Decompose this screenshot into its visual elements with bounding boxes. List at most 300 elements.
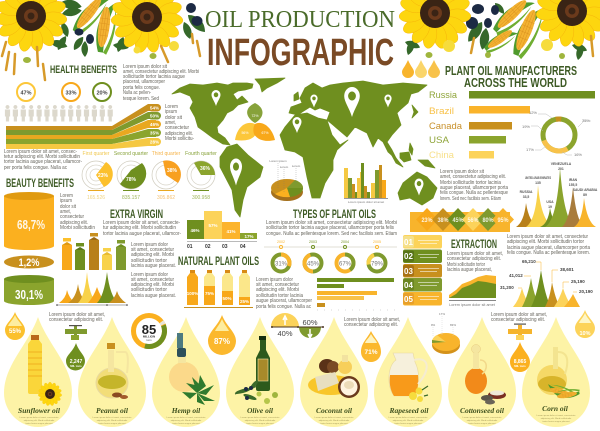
faucet: [65, 325, 87, 340]
sunflower: [38, 382, 62, 406]
text blocks: lacinia augue placerat.: [131, 293, 176, 299]
numbered list: 01: [404, 238, 413, 247]
oil producers peak chart: 201: [558, 167, 564, 171]
sunflower oil drop: tortor lacinia augue placerat: [26, 422, 53, 425]
text block: Lorem: [60, 193, 73, 199]
hemp oil drop: Lorem ipsum dolor sit amet, consectetur: [167, 416, 206, 419]
country bars: China: [429, 150, 455, 161]
dropper bottle: [169, 362, 199, 392]
stacked ribbon chart: 46%: [150, 122, 159, 127]
text and faucet with drop: left: MIL tons: [70, 364, 82, 368]
up and down split chart: 40%: [277, 329, 293, 338]
text block left: Morbi sollicitudin tortor: [447, 262, 485, 268]
foliage: [49, 0, 588, 61]
cottonseed oil drop: Cottonseed oil: [460, 406, 505, 415]
ribbon text: consectetur: [165, 125, 189, 131]
peak chart: 38,601: [560, 267, 574, 272]
bar chart: quarterly: 41%: [226, 229, 236, 234]
panel: types of plant oils: [264, 207, 397, 273]
third quarter: 305.862: [157, 195, 175, 201]
text block: adipiscing elit. Morbi: [256, 287, 299, 293]
timeline: 2004: [341, 240, 349, 244]
seeds and bowl: [488, 391, 506, 399]
olive oil drop: Olive oil: [247, 406, 274, 415]
percentage rings: 47%: [20, 90, 32, 96]
text and faucet with drop: left: [49, 312, 105, 370]
fourth quarter: [185, 151, 217, 201]
text block right: adipiscing elit. Morbi sollicitudin tortor: [507, 239, 584, 245]
timeline: 2003: [309, 240, 317, 244]
text block under ribbons: tortor lacinia augue placerat, ullamcor-: [4, 159, 82, 165]
second quarter: [114, 151, 148, 201]
ribbon text: Lorem: [165, 104, 178, 110]
title: INFOGRAPHIC: [207, 32, 394, 74]
rapeseed flowers: [409, 388, 423, 402]
donut: 35%: [582, 118, 590, 123]
stacked ribbon chart: 54%: [150, 106, 159, 110]
people row: [5, 105, 113, 122]
text block over australia: lorem. Sed nec facilisis sem. Etiam: [440, 196, 501, 202]
olives: [74, 3, 499, 44]
text block: tur adipiscing elit. Morbi sollicitudin: [103, 225, 176, 231]
area chart: Lorem ipsum dolor sit amet: [449, 303, 496, 307]
hemp oil drop: adipiscing elit. Morbi sollicitudin: [171, 419, 202, 422]
bar chart: quarterly: 04: [240, 244, 246, 250]
text block: congue. Nulla ac pellentesque lorem. Sed nec facilisis sem. Etiam: [266, 231, 397, 237]
text block: [103, 220, 181, 237]
text block: amet, consectetur adipiscing elit. Morbi: [123, 69, 199, 75]
peanut oil drop: adipiscing elit. Morbi sollicitudin: [97, 419, 128, 422]
donut charts: 67%: [339, 262, 352, 268]
panel: extra virgin: [56, 207, 181, 306]
percentage diamonds ribbon: 95%: [498, 217, 509, 224]
ribbon text: dolor sit: [165, 115, 182, 121]
horizontal bar chart: [317, 278, 397, 310]
bars over the indian ocean: [344, 163, 388, 204]
3d pie chart: bottom: [431, 312, 460, 354]
coconut oil drop: adipiscing elit. Morbi sollicitudin: [319, 419, 350, 422]
panel: plant oil manufacturers: [402, 60, 595, 161]
second quarter: Second quarter: [114, 151, 148, 157]
oil producers peak chart: 33,5: [523, 195, 529, 199]
text and faucet with drop: right: 8,865: [514, 359, 526, 365]
text block: Lorem ipsum dolor sit: [123, 64, 167, 70]
text block: [266, 220, 397, 237]
text block: placerat, ullamcorper: [123, 79, 165, 85]
text block: ipsum: [60, 198, 72, 204]
sunflower oil drop: Lorem ipsum dolor sit amet, consectetur: [20, 416, 59, 419]
first quarter: 23%: [98, 173, 109, 179]
numbered list: 02: [404, 252, 413, 261]
small drop: 71%: [361, 331, 381, 362]
text block over australia: augue placerat, ullamcorper porta: [440, 185, 509, 191]
panel: natural plant oils: [178, 254, 312, 310]
text and faucet with drop: right: Lorem ipsum dolor sit amet,: [491, 312, 547, 318]
text block: augue placerat, ullamcorper: [256, 298, 312, 304]
small drop: 55%: [5, 312, 25, 340]
numbered list: 05: [404, 295, 413, 304]
text blocks: [131, 242, 176, 299]
peak chart: 25,190: [571, 279, 585, 284]
country bars: [429, 90, 595, 161]
olive oil drop: tortor lacinia augue placerat: [246, 422, 274, 425]
percentage diamonds ribbon: 23%: [422, 217, 433, 224]
jug: [389, 353, 419, 396]
text and faucet with drop: left: Lorem ipsum dolor sit amet,: [49, 312, 105, 318]
corn cobs: [69, 0, 547, 61]
hemp oil drop: [152, 317, 220, 427]
numbered list: 03: [404, 267, 413, 276]
north america: [172, 83, 253, 145]
text and faucet with drop: left: consectetur adipiscing elit.: [49, 317, 103, 323]
text and faucet with drop: right: [491, 312, 547, 372]
3d pie chart: bottom: 17%: [439, 312, 445, 316]
sunflower oil drop: [4, 317, 72, 427]
text block: consectetur: [60, 214, 84, 220]
donut: 19%: [522, 124, 530, 129]
bar chart: quarterly: [187, 211, 257, 250]
bottles: 100%: [187, 291, 198, 296]
flask: [537, 365, 567, 395]
coconut oil drop: Lorem ipsum dolor sit amet, consectetur: [315, 416, 354, 419]
donut charts: 79%: [371, 262, 384, 268]
text block: amet,: [60, 209, 71, 215]
text block left: lacinia augue placerat,: [447, 267, 492, 273]
rapeseed oil drop: Lorem ipsum dolor sit amet, consectetur: [389, 416, 428, 419]
third quarter: 38%: [167, 168, 178, 174]
ribbon text: ipsum: [165, 109, 177, 115]
text block over australia: Morbi sollicitudin tortor lacinia: [440, 180, 502, 186]
wheat and small buds: [2, 34, 593, 80]
petal chart: [235, 103, 275, 141]
text blocks: sit amet, consectetur: [131, 247, 174, 253]
corn oil drop: adipiscing elit. Morbi sollicitudin: [541, 417, 572, 420]
text block over australia: Lorem ipsum dolor sit: [440, 169, 484, 175]
orange drop: [510, 342, 530, 372]
text block under ribbons: [4, 149, 82, 171]
text blocks: lacinia augue placerat.: [131, 263, 176, 269]
text block: dolor sit: [60, 204, 76, 210]
donut: 17%: [526, 147, 534, 152]
small drop: 71%: 71%: [364, 349, 378, 356]
3d bars: [62, 233, 126, 270]
donut charts: [272, 253, 387, 273]
bar chart: quarterly: 17%: [244, 234, 254, 239]
small bottle: [338, 360, 352, 374]
fourth quarter: Fourth quarter: [185, 151, 217, 157]
peanut oil drop: Lorem ipsum dolor sit amet, consectetur: [93, 416, 132, 419]
cottonseed oil drop: Lorem ipsum dolor sit amet, consectetur: [463, 416, 502, 419]
text block under ribbons: Lorem ipsum dolor sit amet, consec-: [4, 149, 77, 155]
plate and butter: [308, 375, 354, 395]
timeline: [264, 240, 397, 248]
text block: Morbi sollicitudin: [60, 225, 95, 231]
text block over australia: amet, consectetur adipiscing elit.: [440, 174, 506, 180]
corn cobs: [546, 383, 575, 399]
peak chart: 31,200: [500, 285, 514, 290]
bar chart: quarterly: 03: [222, 244, 228, 250]
country bars: Canada: [429, 121, 463, 132]
text block over australia: [440, 169, 509, 202]
peak chart: 20,190: [579, 289, 593, 294]
petal chart: 56%: [241, 131, 249, 135]
text blocks: sollicitudin tortor: [131, 258, 167, 264]
percentage rings: [17, 83, 111, 101]
panel: bottom oil drops: [4, 317, 590, 427]
decanter: [465, 368, 487, 394]
first quarter: [82, 151, 113, 201]
percentage rings: 33%: [65, 90, 77, 96]
olive oil drop: adipiscing elit. Morbi sollicitudin: [245, 419, 276, 422]
bar chart: quarterly: 46%: [190, 228, 200, 233]
sunflower oil drop: adipiscing elit. Morbi sollicitudin: [24, 419, 55, 422]
donut: 16%: [574, 152, 582, 157]
donut: 85 million tons: 85: [142, 322, 156, 337]
faucet: [508, 324, 532, 340]
oil producers peak chart: 155,5: [569, 183, 577, 187]
peanuts: [112, 392, 122, 398]
text block: Nulla ac pellen-: [123, 90, 151, 96]
peak chart: 41,012: [509, 273, 523, 278]
text block: sollicitudin tortor lacinia augue: [123, 74, 185, 80]
olive bottle: [256, 336, 270, 391]
oil producers peak chart: 135: [535, 181, 541, 185]
numbered list: [403, 235, 442, 306]
africa: [280, 113, 348, 198]
ribbon text: Morbi sollicitu-: [165, 136, 194, 142]
percentage diamonds ribbon: 56%: [468, 217, 479, 224]
numbered list: 04: [404, 281, 413, 290]
stacked ribbon chart: [6, 104, 161, 149]
text block under ribbons: per porta felis congue. Nulla ac: [4, 165, 67, 171]
percentage diamonds ribbon: 80%: [482, 217, 494, 224]
small drops: [402, 60, 440, 78]
bar chart: quarterly: 01: [187, 244, 193, 250]
text block right: [507, 234, 591, 256]
small drop: 10%: [575, 310, 595, 338]
donut: 85 million tons: [127, 309, 171, 353]
text and faucet with drop: left: 2,247: [70, 359, 82, 365]
coconut oil drop: Coconut oil: [316, 406, 353, 415]
olive branch: [235, 386, 258, 394]
text blocks: sollicitudin tortor: [131, 287, 167, 293]
corn oil drop: tortor lacinia augue placerat: [542, 420, 570, 423]
panel: health benefits: [5, 64, 199, 149]
text block middle: [344, 317, 400, 328]
text block middle: Lorem ipsum dolor sit amet,: [344, 317, 400, 323]
sunflowers: [0, 0, 600, 54]
bars over the indian ocean: Lorem ipsum dolor sit amet: [348, 200, 384, 204]
3d pie on africa: Lorem: [280, 165, 289, 169]
peak chart: [56, 272, 128, 306]
country bars: Brazil: [429, 106, 454, 117]
second quarter: 78%: [126, 177, 137, 183]
quarterly pie charts: [82, 151, 217, 201]
small drop: 87%: [208, 315, 236, 355]
green drop: [66, 343, 85, 370]
text block: sollicitudin tortor lacinia: [256, 293, 304, 299]
ribbon text: [165, 104, 194, 142]
bottles: 75%: [205, 291, 214, 296]
text blocks: adipiscing elit. Morbi: [131, 252, 174, 258]
donut: 12%: [529, 110, 537, 115]
text block: porta felis congue. Nulla ac: [256, 304, 311, 310]
heading: EXTRA VIRGIN: [110, 207, 163, 221]
first quarter: First quarter: [83, 151, 110, 157]
text blocks: Lorem ipsum dolor: [131, 242, 168, 248]
coconut oil drop: tortor lacinia augue placerat: [320, 422, 348, 425]
oil producers peak chart: USA: [546, 200, 554, 204]
percentage diamonds ribbon: 45%: [452, 217, 464, 224]
ribbon text: amet,: [165, 120, 176, 126]
peanut oil drop: tortor lacinia augue placerat: [98, 422, 126, 425]
south america: [220, 144, 263, 217]
heading: NATURAL PLANT OILS: [178, 254, 259, 268]
orange cylinder: 68,7%: [17, 217, 45, 232]
petal chart: 72%: [251, 114, 259, 118]
oil producers peak chart: [516, 162, 598, 227]
rapeseed oil drop: tortor lacinia augue placerat: [394, 422, 422, 425]
bar chart: quarterly: 57%: [208, 223, 218, 228]
country bars: USA: [429, 135, 450, 146]
up and down split chart: [271, 313, 324, 338]
cottonseed oil drop: [448, 317, 516, 427]
oil producers peak chart: 19: [548, 205, 552, 209]
title: OIL PRODUCTION: [205, 7, 395, 33]
text block under ribbons: tetur adipiscing elit. Morbi sollicitudin: [4, 154, 80, 160]
fourth quarter: 300.958: [192, 195, 210, 201]
text block left: consectetur adipiscing elit.: [447, 256, 501, 262]
panel: beauty benefits: [4, 178, 95, 305]
peak chart: [500, 259, 593, 307]
third quarter: [152, 151, 181, 201]
text block over australia: felis congue. Nulla ac pellentesque: [440, 190, 508, 196]
australia: [398, 172, 437, 205]
uk: [294, 92, 299, 101]
heading: EXTRACTION: [451, 237, 497, 251]
up and down split chart: 60%: [302, 318, 318, 327]
text blocks: Lorem ipsum dolor: [131, 272, 168, 278]
olive oil drop: Lorem ipsum dolor sit amet, consectetur: [241, 416, 280, 419]
ribbon text: adipiscing elit.: [165, 131, 193, 137]
panel: plant oil manufacturers: ACROSS THE WORLD: [464, 76, 567, 90]
text block: Lorem ipsum dolor sit amet, consecte-: [103, 220, 180, 226]
3d pie chart: bottom: 83%: [450, 323, 456, 327]
title: [205, 7, 395, 74]
oil producers peak chart: 89: [583, 193, 587, 197]
peanut oil drop: [78, 317, 146, 427]
stacked ribbon chart: 50%: [150, 114, 159, 118]
country bars: Russia: [429, 90, 458, 101]
timeline: 2002: [277, 240, 285, 244]
percentage rings: 20%: [96, 90, 108, 96]
donut: 85 million tons: MILLION: [143, 334, 155, 338]
stacked ribbon chart: 28%: [150, 140, 159, 144]
oil producers peak chart: SAUDI ARABIA: [573, 188, 598, 192]
corn oil drop: [522, 317, 590, 427]
indonesia: [390, 143, 435, 168]
small drop: 10%: 10%: [579, 331, 591, 337]
text block: Lorem ipsum dolor sit amet, consectetur adipiscing elit. Morbi: [266, 220, 397, 226]
world map: [172, 78, 437, 217]
text block: Lorem ipsum dolor: [256, 277, 293, 283]
text block: porta felis congue.: [123, 85, 160, 91]
bottle: [28, 335, 42, 394]
small drop: 55%: 55%: [9, 329, 22, 335]
heading: TYPES OF PLANT OILS: [293, 207, 376, 221]
area chart: [449, 275, 496, 307]
hemp leaves: [182, 375, 215, 405]
oil producers peak chart: RUSSIA: [520, 190, 533, 194]
text block: tesque lorem. Sed: [123, 96, 159, 102]
oil producers peak chart: IRAN: [569, 178, 578, 182]
map pins: [212, 87, 424, 196]
3d pie chart: bottom: 9%: [431, 323, 435, 327]
corn oil drop: Lorem ipsum dolor sit amet, consectetur: [537, 414, 576, 417]
oil producers peak chart: VENEZUELA: [551, 162, 572, 166]
small drop: 87%: 87%: [214, 337, 230, 346]
text block left: [447, 251, 503, 273]
japan: [412, 105, 418, 118]
text block: [256, 277, 312, 310]
donut: 85 million tons: tons: [146, 338, 152, 342]
corn oil drop: Corn oil: [542, 404, 569, 413]
3d pie on africa: [269, 159, 303, 201]
greenland: [255, 78, 285, 92]
peanut oil drop: Peanut oil: [96, 406, 129, 415]
fourth quarter: 36%: [200, 166, 211, 172]
peak chart: 65,210: [522, 259, 536, 264]
heading: BEAUTY BENEFITS: [6, 178, 74, 190]
third quarter: Third quarter: [152, 151, 181, 157]
text block left: Lorem ipsum dolor sit amet,: [447, 251, 503, 257]
cruet: [96, 368, 128, 398]
text blocks: adipiscing elit. Morbi: [131, 282, 174, 288]
panel: extraction: [447, 234, 593, 307]
petal chart: 67%: [261, 131, 269, 135]
rapeseed oil drop: [374, 317, 442, 427]
top decoration: sunflowers, corn, olives: [0, 0, 600, 80]
cottonseed oil drop: adipiscing elit. Morbi sollicitudin: [467, 419, 498, 422]
hemp oil drop: tortor lacinia augue placerat: [172, 422, 200, 425]
second quarter: 835.157: [122, 195, 140, 201]
donut: [522, 110, 591, 157]
olive oil drop: [226, 317, 294, 427]
text block: adipiscing elit.: [60, 220, 88, 226]
text and faucet with drop: right: consectetur adipiscing elit.: [491, 317, 545, 323]
text block: sit amet, consectetur: [256, 282, 299, 288]
text block middle: consectetur adipiscing elit.: [344, 322, 398, 328]
cottonseed oil drop: tortor lacinia augue placerat: [468, 422, 496, 425]
heading: HEALTH BENEFITS: [50, 64, 117, 76]
sunflower oil drop: Sunflower oil: [18, 406, 61, 415]
oil producers peak chart: UNITED ARAB EMIRATES: [525, 176, 551, 180]
percentage diamonds ribbon: [410, 208, 514, 232]
text blocks: sit amet, consectetur: [131, 277, 174, 283]
timeline: 2005: [373, 240, 381, 244]
text block: [60, 193, 95, 231]
coconut oil drop: [300, 317, 368, 427]
bottles: 50%: [222, 296, 232, 301]
bottles: 25%: [240, 299, 249, 304]
3d pie on africa: Lorem ipsum: [269, 159, 287, 163]
3d pie on africa: Lorem: [292, 164, 301, 168]
text block: sollicitudin tortor lacinia augue placerat, ullamcorper porta felis: [266, 225, 394, 231]
text block: [123, 64, 199, 102]
text and faucet with drop: right: MIL tons: [514, 364, 526, 368]
stacked ribbon chart: 35%: [150, 130, 159, 136]
eurasia: [289, 81, 427, 160]
